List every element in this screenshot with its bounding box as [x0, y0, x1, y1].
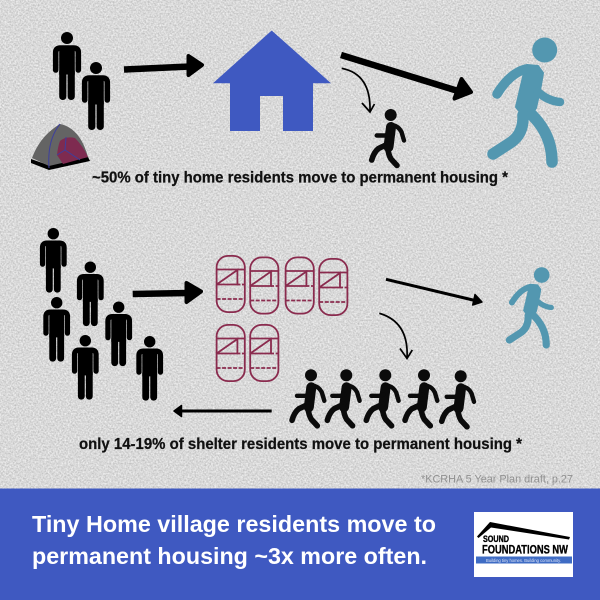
logo wordmark: SOUND [483, 534, 509, 544]
icon: teal walker small [509, 267, 551, 345]
icon: sleeping bags [217, 256, 347, 381]
icon: tent [31, 124, 90, 170]
logo wordmark: FOUNDATIONS NW [482, 542, 569, 556]
icon: group of six people [43, 228, 160, 401]
footer band [0, 488, 600, 600]
icon: blue house [213, 30, 331, 131]
icon: teal walking person [493, 38, 560, 162]
arrow: curved to small walker [342, 68, 374, 112]
icon: two people [56, 32, 107, 130]
logo: Sound Foundations NW [474, 512, 573, 577]
arrow: curved to walkers [379, 313, 412, 358]
arrow: shelter to permanent housing [386, 279, 482, 305]
panel: tiny homes pathway [31, 30, 560, 186]
caption: tiny home outcome: ~50% of tiny home residents move to permanent housing * [92, 170, 509, 186]
footnote: *KCRHA 5 Year Plan draft, p.27 [421, 474, 573, 486]
headline takeaway: Tiny Home village residents move to [32, 511, 436, 537]
logo roof [477, 522, 570, 540]
arrow: people to house [124, 56, 202, 75]
caption: shelter outcome: only 14-19% of shelter residents move to permanent housing * [79, 436, 523, 453]
logo wordmark [482, 534, 569, 556]
arrow: house to permanent housing [341, 55, 471, 98]
logo tagline strip: Building tiny homes. Building community. [486, 558, 561, 563]
panel: shelter pathway [43, 228, 551, 453]
arrow: walkers back to start [174, 406, 272, 416]
icon: five black walkers [292, 369, 474, 427]
arrow: people to shelter [133, 283, 201, 302]
headline takeaway: permanent housing ~3x more often. [32, 543, 427, 569]
icon: small black walker [372, 109, 404, 166]
